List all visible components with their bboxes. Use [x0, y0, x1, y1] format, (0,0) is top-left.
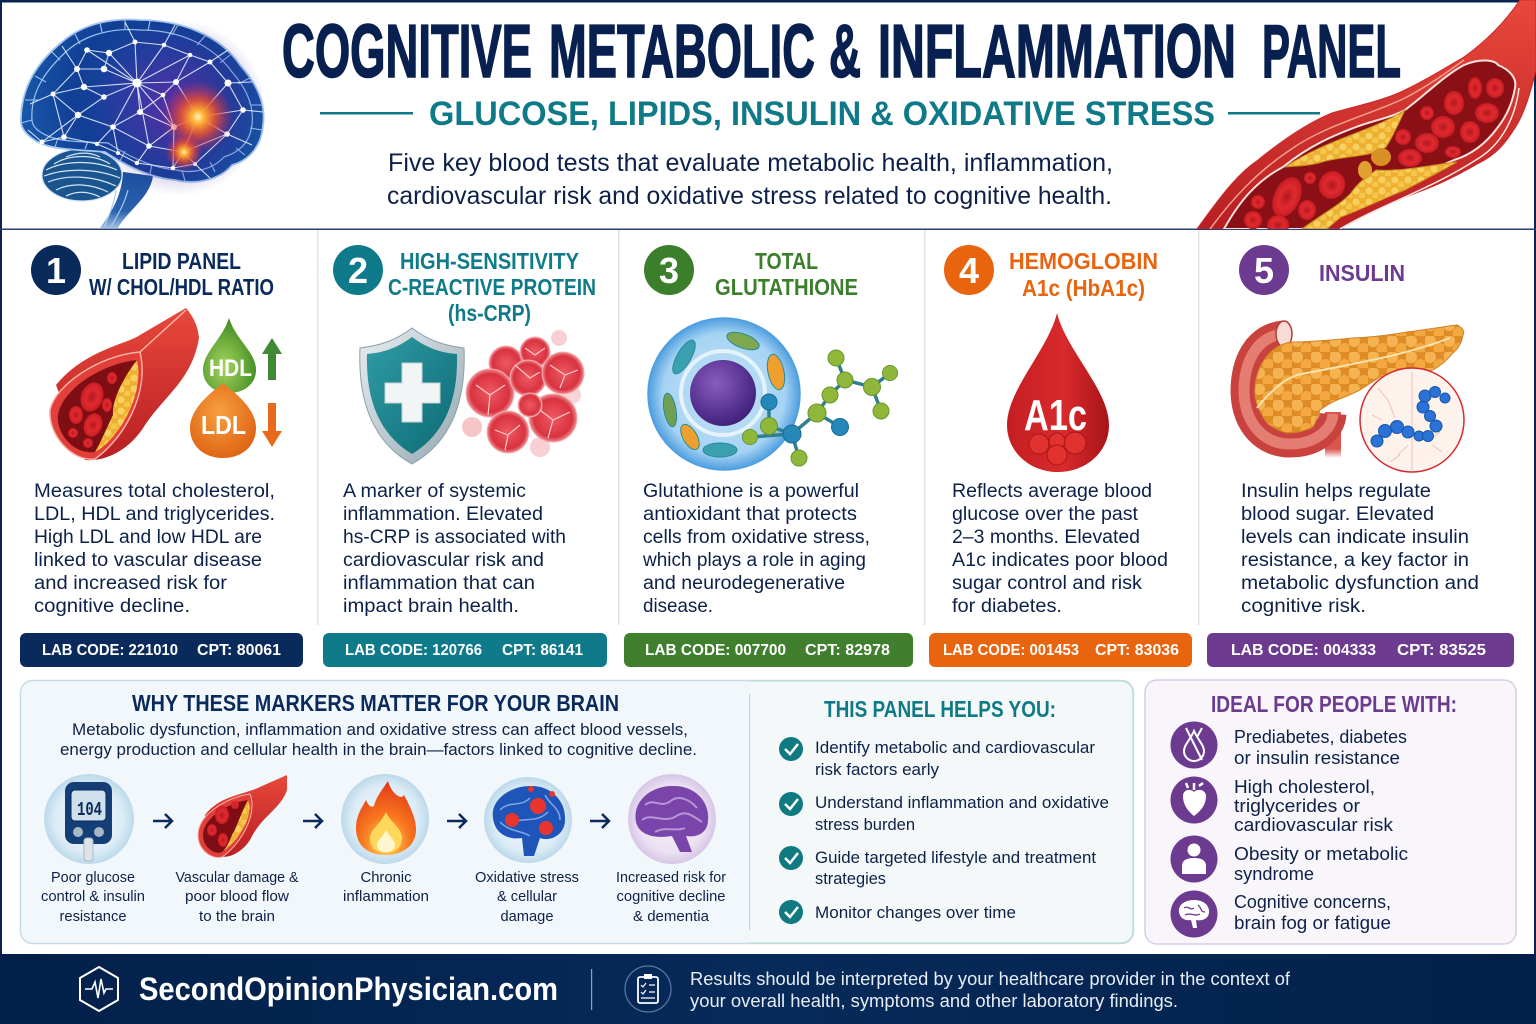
description: metabolic dysfunction and — [1241, 573, 1479, 594]
icon: hexagon heartbeat logo — [80, 967, 118, 1011]
benefit list — [779, 737, 1109, 924]
panel: why these markers matter — [20, 680, 1134, 944]
item: cognitive: brain fog or fatigue — [1234, 913, 1391, 933]
lab code: CPT: 80061 — [197, 642, 281, 659]
number badge 3 — [644, 245, 694, 295]
flow step: glucose meter: control & insulin — [41, 888, 145, 905]
check item 4 — [779, 900, 1016, 924]
description — [343, 481, 566, 617]
flow step: oxidative stress — [475, 777, 579, 925]
flow step: oxidative stress: damage — [500, 908, 554, 925]
heading: HIGH-SENSITIVITY — [400, 248, 579, 274]
description: resistance, a key factor in — [1241, 550, 1469, 571]
heading — [1009, 248, 1158, 301]
intro text: cardiovascular risk and oxidative stress related to cognitive health. — [387, 182, 1112, 210]
flow step: brain decline — [616, 774, 726, 925]
description — [34, 481, 275, 617]
check item 2: Understand inflammation and oxidative — [815, 793, 1109, 812]
flow step: oxidative stress: & cellular — [497, 888, 557, 905]
description: glucose over the past — [952, 504, 1139, 525]
panel: lipid panel — [20, 245, 303, 667]
illustration: A1c blood drop: A1c — [1024, 391, 1087, 440]
illustration: artery and HDL LDL drops — [50, 308, 282, 460]
item: cholesterol: cardiovascular risk — [1234, 815, 1394, 835]
number badge 5 — [1239, 245, 1289, 295]
intro text: Metabolic dysfunction, inflammation and oxidative stress can affect blood vessels, — [72, 720, 688, 739]
lab code: LAB CODE: 004333 — [1231, 642, 1376, 659]
header — [21, 0, 1536, 235]
flow step: glucose meter: Poor glucose — [51, 869, 135, 886]
item: obesity: Obesity or metabolic — [1234, 844, 1408, 864]
item: cognitive: Cognitive concerns, — [1234, 892, 1391, 912]
number badge 2: 2 — [348, 250, 368, 291]
item: obesity: syndrome — [1234, 864, 1314, 884]
item: prediabetes: Prediabetes, diabetes — [1234, 727, 1407, 747]
description — [1241, 481, 1479, 617]
flow step: chronic inflammation — [341, 774, 429, 905]
lab code: CPT: 82978 — [805, 642, 890, 659]
flow step: vascular damage: to the brain — [199, 908, 275, 925]
disclaimer: your overall health, symptoms and other laboratory findings. — [690, 991, 1178, 1011]
arrow — [303, 814, 322, 828]
lab code — [20, 633, 303, 667]
item: prediabetes — [1170, 722, 1407, 768]
description: inflammation. Elevated — [343, 504, 543, 525]
subtitle: GLUCOSE, LIPIDS, INSULIN & OXIDATIVE STRESS — [429, 95, 1215, 133]
check item 2: stress burden — [815, 815, 915, 834]
number badge 2 — [333, 245, 383, 295]
description: blood sugar. Elevated — [1241, 504, 1434, 525]
heading — [715, 248, 858, 300]
description: disease. — [643, 596, 713, 617]
illustration: pancreas and insulin molecule — [1244, 321, 1464, 472]
flow step: chronic inflammation: inflammation — [343, 888, 429, 905]
flow step: glucose meter: resistance — [60, 908, 126, 925]
check item 3: Guide targeted lifestyle and treatment — [815, 848, 1096, 867]
description: cognitive risk. — [1241, 596, 1366, 617]
description: levels can indicate insulin — [1241, 527, 1469, 548]
lab code: CPT: 83525 — [1397, 642, 1486, 659]
number badge 3: 3 — [659, 250, 679, 291]
flow step: vascular damage: Vascular damage & — [176, 869, 298, 886]
description: impact brain health. — [343, 596, 519, 617]
description: High LDL and low HDL are — [34, 527, 262, 548]
illustration: A1c blood drop — [1007, 313, 1109, 472]
heading: C-REACTIVE PROTEIN — [388, 274, 596, 300]
description: and neurodegenerative — [643, 573, 845, 594]
intro text — [60, 720, 697, 759]
illustration: artery and HDL LDL drops: LDL — [201, 410, 246, 440]
arrow — [590, 814, 609, 828]
description: which plays a role in aging — [642, 550, 866, 571]
heading: LIPID PANEL — [122, 248, 241, 274]
disclaimer — [690, 969, 1291, 1011]
description — [642, 481, 870, 617]
intro text — [387, 149, 1113, 210]
lab code: LAB CODE: 007700 — [645, 642, 786, 659]
description: for diabetes. — [952, 596, 1062, 617]
item: cholesterol: triglycerides or — [1234, 796, 1360, 816]
description: Insulin helps regulate — [1241, 481, 1431, 502]
flow step: oxidative stress: Oxidative stress — [475, 869, 579, 886]
description: hs-CRP is associated with — [343, 527, 566, 548]
description: A marker of systemic — [343, 481, 526, 502]
heading: GLUTATHIONE — [715, 274, 858, 300]
icon: glowing brain — [21, 20, 266, 228]
flow step: vascular damage: poor blood flow — [185, 888, 289, 905]
item: cognitive — [1170, 890, 1391, 938]
number badge 5: 5 — [1254, 250, 1274, 291]
description: cognitive decline. — [34, 596, 190, 617]
panel: insulin — [1207, 245, 1514, 667]
description: Reflects average blood — [952, 481, 1152, 502]
illustration: artery with plaque — [1197, 0, 1536, 235]
check item 1: risk factors early — [815, 760, 939, 779]
flow step: brain decline: Increased risk for — [616, 869, 726, 886]
flow step: vascular damage — [176, 775, 298, 925]
description: antioxidant that protects — [643, 504, 857, 525]
heading: TOTAL — [755, 248, 818, 274]
description: A1c indicates poor blood — [952, 550, 1168, 571]
check item 3: strategies — [815, 869, 886, 888]
illustration: cell and molecule — [648, 318, 898, 470]
panel: ideal for people with — [1145, 680, 1516, 944]
heading: W/ CHOL/HDL RATIO — [89, 274, 274, 300]
number badge 4 — [944, 245, 994, 295]
heading — [89, 248, 274, 300]
check item 3 — [779, 846, 1096, 888]
number badge 4: 4 — [959, 250, 979, 291]
intro text: energy production and cellular health in the brain—factors linked to cognitive decline. — [60, 740, 697, 759]
item: prediabetes: or insulin resistance — [1234, 748, 1400, 768]
panel: hs-CRP — [323, 245, 607, 667]
flow step: brain decline: cognitive decline — [616, 888, 726, 905]
lab code: LAB CODE: 221010 — [42, 642, 178, 659]
description: cardiovascular risk and — [343, 550, 544, 571]
lab code — [1207, 633, 1514, 667]
check item 4: Monitor changes over time — [815, 903, 1016, 922]
description: and increased risk for — [34, 573, 228, 594]
illustration: artery and HDL LDL drops: HDL — [209, 355, 252, 382]
flow step: glucose meter: 104 — [77, 799, 102, 821]
description: sugar control and risk — [952, 573, 1143, 594]
flow step: chronic inflammation: Chronic — [360, 869, 412, 886]
arrow — [447, 814, 466, 828]
description: cells from oxidative stress, — [643, 527, 870, 548]
check item 2 — [779, 792, 1109, 834]
check item 1: Identify metabolic and cardiovascular — [815, 738, 1095, 757]
lab code: LAB CODE: 120766 — [345, 642, 482, 659]
lab code: CPT: 86141 — [502, 642, 583, 659]
heading: IDEAL FOR PEOPLE WITH: — [1211, 691, 1457, 717]
item: obesity — [1170, 836, 1408, 884]
item: cholesterol — [1170, 776, 1394, 835]
arrow — [153, 814, 172, 828]
title: INFLAMMATION — [878, 9, 1236, 93]
title: COGNITIVE — [282, 9, 532, 93]
description: Glutathione is a powerful — [643, 481, 859, 502]
flow step: glucose meter — [41, 774, 145, 925]
panel heading: this panel helps you: THIS PANEL HELPS YOU: — [824, 696, 1056, 722]
description — [952, 481, 1168, 617]
lab code: CPT: 83036 — [1095, 642, 1179, 659]
check item 1 — [779, 737, 1095, 779]
title: & — [829, 9, 861, 93]
description: Measures total cholesterol, — [34, 481, 275, 502]
title: METABOLIC — [549, 9, 815, 93]
website: SecondOpinionPhysician.com — [139, 971, 558, 1007]
panel: hemoglobin A1c — [929, 245, 1192, 667]
heading — [388, 248, 596, 326]
panel: total glutathione — [624, 245, 913, 667]
heading: HEMOGLOBIN — [1009, 248, 1158, 274]
lab code — [624, 633, 913, 667]
number badge 1: 1 — [46, 250, 66, 291]
footer — [0, 954, 1536, 1024]
heading: A1c (HbA1c) — [1022, 275, 1145, 301]
description: inflammation that can — [343, 573, 535, 594]
lab code — [323, 633, 607, 667]
disclaimer: Results should be interpreted by your healthcare provider in the context of — [690, 969, 1291, 989]
heading: (hs-CRP) — [448, 300, 531, 326]
lab code — [929, 633, 1192, 667]
item: cholesterol: High cholesterol, — [1234, 777, 1375, 797]
description: 2–3 months. Elevated — [952, 527, 1140, 548]
number badge 1 — [31, 245, 81, 295]
heading: INSULIN — [1319, 260, 1405, 286]
illustration: shield and inflamed cells — [360, 328, 584, 464]
lab code: LAB CODE: 001453 — [943, 642, 1079, 659]
description: LDL, HDL and triglycerides. — [34, 504, 275, 525]
description: linked to vascular disease — [34, 550, 262, 571]
intro text: Five key blood tests that evaluate metabolic health, inflammation, — [388, 149, 1113, 177]
heading: WHY THESE MARKERS MATTER FOR YOUR BRAIN — [132, 690, 619, 716]
icon: clipboard — [625, 966, 671, 1012]
title — [282, 9, 1401, 93]
title: PANEL — [1262, 9, 1401, 93]
flow step: brain decline: & dementia — [633, 908, 710, 925]
